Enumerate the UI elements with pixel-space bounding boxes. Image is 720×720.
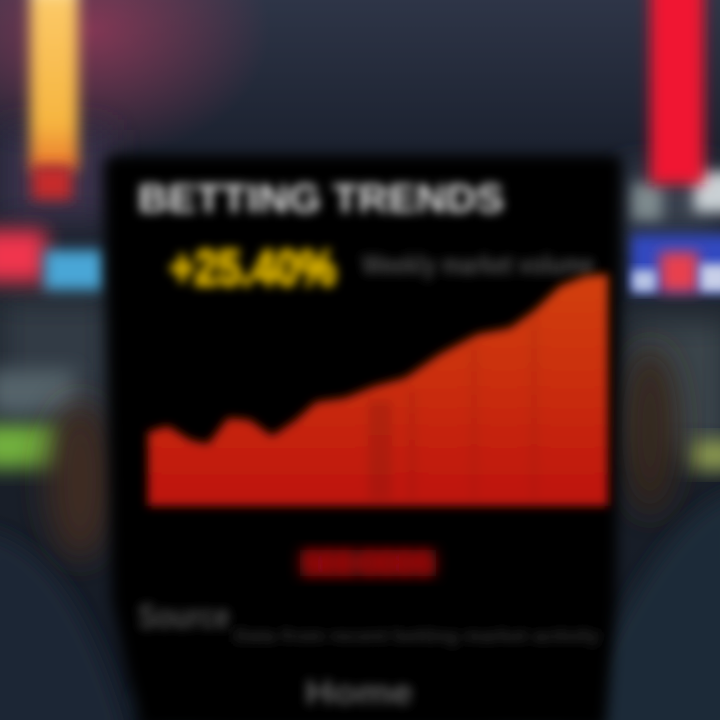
right stadium [620,170,720,470]
phone panel [104,155,622,720]
left stadium [0,130,110,468]
bottom home label: Home [305,674,413,712]
right blue and red board [630,234,720,292]
yellow stat: +25.40% [170,240,336,296]
heading: BETTING TRENDS [138,177,504,221]
footer line of text: Data from recent betting market activity [234,626,600,646]
yellow banner [30,0,78,200]
stat caption: Weekly market volume [362,249,594,280]
left blue board [44,250,104,290]
button label: SEE ODDS [304,545,432,581]
darker chart bands [368,400,392,500]
footer label: Source [138,598,230,636]
left stadium field [0,424,64,468]
red button [300,550,436,576]
red banner [650,0,704,184]
sleeves [0,490,720,720]
hands holding the phone [46,345,678,560]
top-left light glow [0,0,270,160]
area chart [148,274,608,506]
left red board [0,230,46,282]
